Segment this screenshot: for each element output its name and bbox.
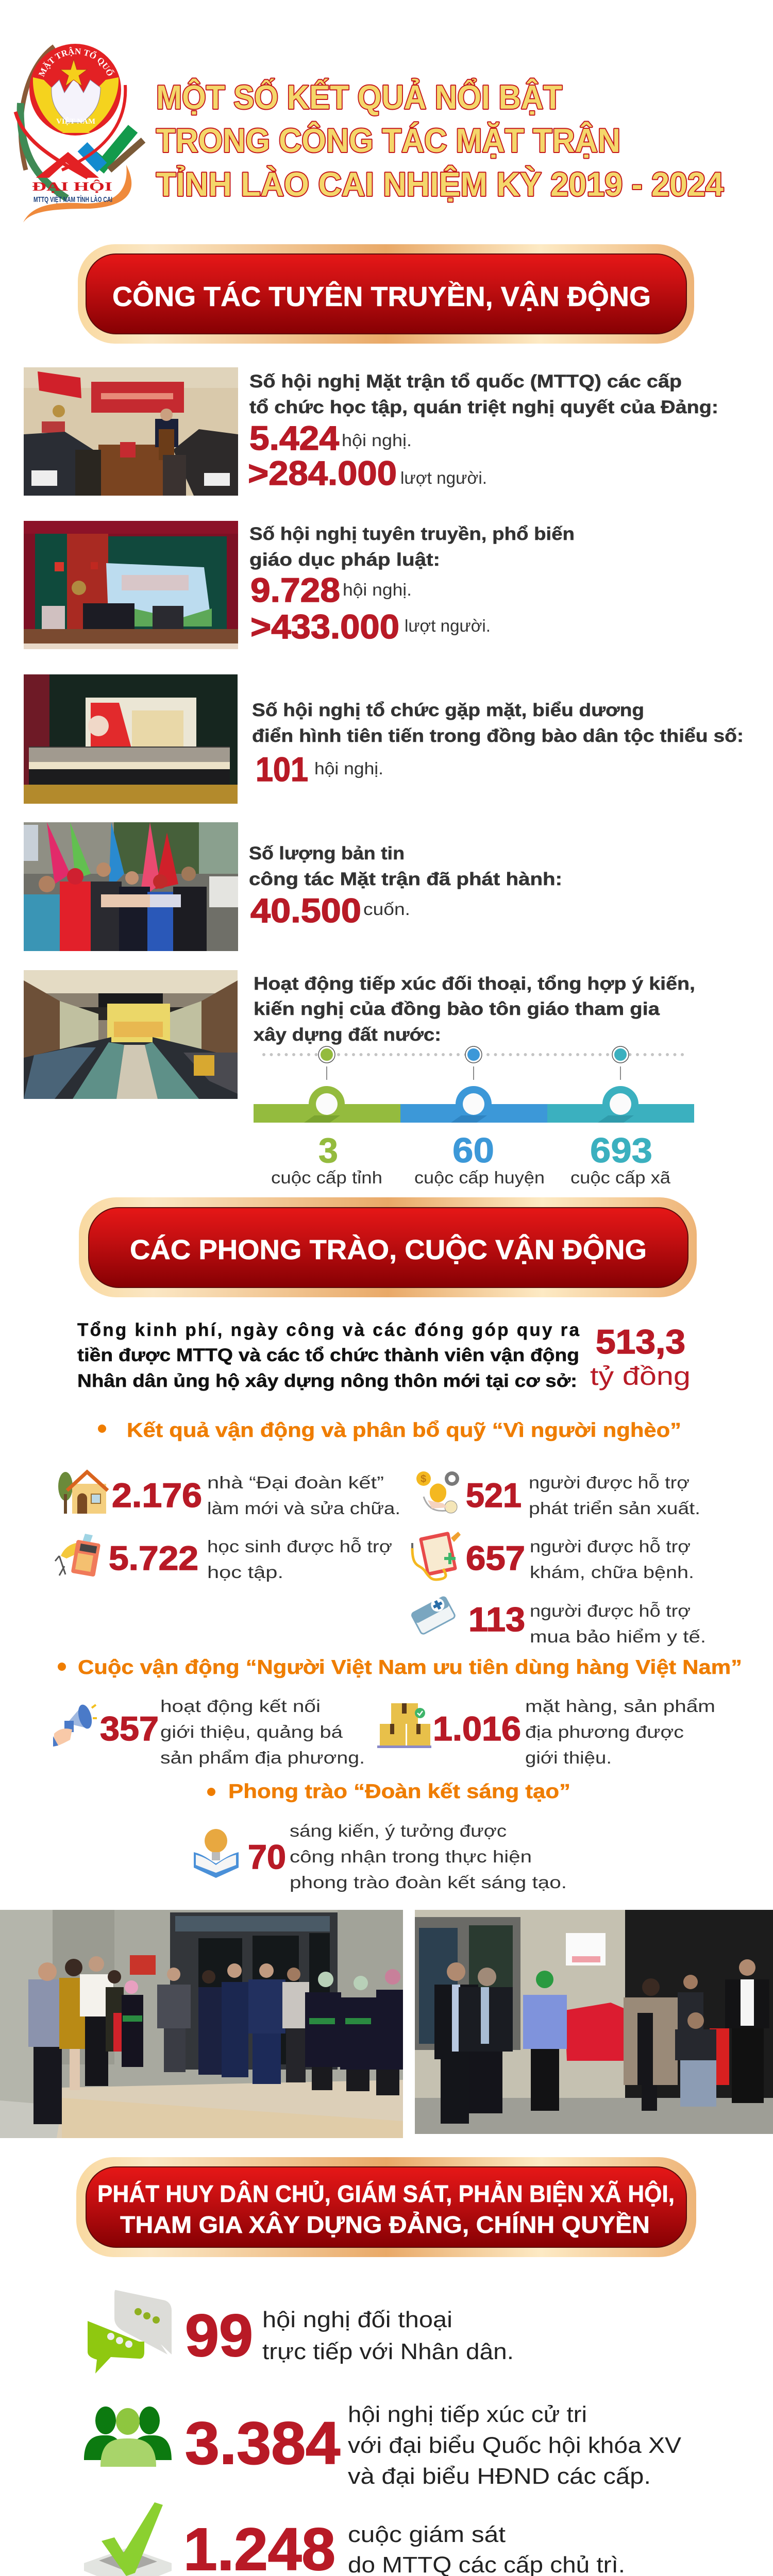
stat: connection activities: 357 <box>100 1709 159 1748</box>
photo: honoring ceremony <box>24 674 238 804</box>
icon: check mark <box>84 2502 172 2576</box>
stat: health care: 657 <box>466 1539 525 1577</box>
text block: total contributions: Nhân dân ủng hộ xây dựng nông thôn mới tại cơ sở: <box>77 1371 577 1391</box>
stat: initiatives <box>248 1821 567 1892</box>
icon: money hand: $ <box>421 1473 426 1485</box>
stat: province: 3 <box>318 1131 338 1170</box>
title: TỈNH LÀO CAI NHIỆM KỲ 2019 - 2024 <box>156 165 724 203</box>
stat: connection activities: sản phẩm địa phương. <box>160 1748 365 1767</box>
stat: production support: 521 <box>466 1476 522 1514</box>
text block: total contributions: Tổng kinh phí, ngày công và các đóng góp quy ra <box>77 1320 580 1340</box>
stat: connection activities: giới thiệu, quảng bá <box>160 1722 343 1741</box>
photo: reading bulletin <box>24 822 238 951</box>
stat: district <box>414 1131 545 1187</box>
icon: house <box>58 1472 108 1514</box>
stat: students: học tập. <box>207 1563 283 1582</box>
heading <box>97 2180 675 2238</box>
stat: province: cuộc cấp tỉnh <box>271 1168 382 1187</box>
text block: Party resolutions <box>248 371 718 492</box>
stat: dialogues <box>185 2302 514 2369</box>
stat: health insurance: 113 <box>468 1600 525 1638</box>
photo: house handover right <box>415 1910 773 2134</box>
text block: Party resolutions: 5.424 <box>249 419 339 457</box>
icon: light bulb on book <box>194 1829 239 1878</box>
stat: students: học sinh được hỗ trợ <box>207 1537 392 1556</box>
stat: students <box>109 1537 392 1582</box>
stat: voter meetings <box>185 2402 682 2489</box>
stat: connection activities: hoạt động kết nối <box>160 1697 321 1716</box>
stat: initiatives: 70 <box>248 1838 286 1876</box>
stat: commune: 693 <box>590 1131 652 1170</box>
panel: section banner 3 <box>76 2157 696 2257</box>
stat: commune <box>570 1131 671 1187</box>
stat: local products: mặt hàng, sản phẩm <box>525 1697 715 1716</box>
text block: legal education: giáo dục pháp luật: <box>249 550 440 570</box>
marker: province <box>318 1046 335 1080</box>
stat: health insurance: người được hỗ trợ <box>530 1601 691 1620</box>
stat: commune: cuộc cấp xã <box>570 1168 671 1187</box>
band: teal segment <box>547 1086 694 1123</box>
stat: houses: nhà “Đại đoàn kết” <box>207 1473 384 1492</box>
stat: connection activities <box>100 1697 365 1767</box>
text block: religious dialogue: kiến nghị của đồng bào tôn giáo tham gia <box>254 999 660 1019</box>
timeline: dialogue levels <box>254 1046 694 1187</box>
stat: local products: giới thiệu. <box>525 1748 612 1767</box>
stat: health care: khám, chữa bệnh. <box>530 1563 694 1582</box>
title <box>156 78 724 203</box>
icon: people <box>84 2406 172 2467</box>
stat: district: cuộc cấp huyện <box>414 1168 545 1187</box>
text block: legal education <box>249 524 575 646</box>
icon: megaphone <box>53 1703 97 1747</box>
heading: PHÁT HUY DÂN CHỦ, GIÁM SÁT, PHẢN BIỆN XÃ HỘI, <box>97 2180 675 2207</box>
icon: calculator <box>55 1534 100 1577</box>
text block: ethnic minority honors: hội nghị. <box>314 759 383 778</box>
icon: boxes <box>377 1703 431 1748</box>
text block: total contributions: tiền được MTTQ và các tổ chức thành viên vận động <box>77 1345 579 1365</box>
text block: bulletins: công tác Mặt trận đã phát hành: <box>249 869 562 889</box>
icon: congress logo <box>13 44 145 223</box>
stat: voter meetings: với đại biểu Quốc hội khóa XV <box>348 2433 682 2458</box>
panel: section banner 1 <box>78 244 694 344</box>
text block: bulletins: Số lượng bản tin <box>249 843 405 863</box>
text block: legal education: lượt người. <box>405 616 491 635</box>
marker: commune <box>612 1046 629 1080</box>
icon: congress logo: MTTQ VIỆT NAM TỈNH LÀO CAI <box>33 195 112 204</box>
text block: total contributions: tỷ đồng <box>590 1362 691 1391</box>
text block: bulletins: cuốn. <box>363 900 410 919</box>
marker: district <box>465 1046 482 1080</box>
text block: legal education: 9.728 <box>250 571 340 609</box>
photo: conference 1 <box>24 367 238 496</box>
stat: initiatives: sáng kiến, ý tưởng được <box>290 1821 507 1840</box>
stat: voter meetings: và đại biểu HĐND các cấp. <box>348 2464 651 2489</box>
text block: Party resolutions: lượt người. <box>400 468 487 487</box>
heading: creative solidarity: Phong trào “Đoàn kết sáng tạo” <box>228 1781 570 1803</box>
icon: congress logo: VIỆT NAM <box>56 117 95 126</box>
heading: THAM GIA XÂY DỰNG ĐẢNG, CHÍNH QUYỀN <box>120 2211 650 2238</box>
stat: initiatives: công nhận trong thực hiện <box>290 1847 532 1866</box>
stat: health care: người được hỗ trợ <box>530 1537 691 1556</box>
text block: religious dialogue <box>254 974 695 1045</box>
title: TRONG CÔNG TÁC MẶT TRẬN <box>156 122 620 159</box>
text block: Party resolutions: Số hội nghị Mặt trận tổ quốc (MTTQ) các cấp <box>249 371 682 392</box>
stat: production support: phát triển sản xuất. <box>529 1499 700 1518</box>
photo: workshop hall <box>24 970 238 1099</box>
stat: health insurance: mua bảo hiểm y tế. <box>530 1627 706 1646</box>
text block: bulletins <box>249 843 562 929</box>
stat: production support: người được hỗ trợ <box>529 1473 690 1492</box>
icon: medical clipboard <box>412 1532 461 1580</box>
text block: total contributions: 513,3 <box>596 1323 685 1361</box>
text block: legal education: hội nghị. <box>343 580 412 599</box>
text block: Party resolutions: hội nghị. <box>342 431 412 450</box>
text block: ethnic minority honors: Số hội nghị tổ chức gặp mặt, biểu dương <box>252 700 644 720</box>
stat: local products <box>433 1697 715 1767</box>
photo: legal conference <box>24 521 238 649</box>
heading: CÁC PHONG TRÀO, CUỘC VẬN ĐỘNG <box>130 1234 647 1265</box>
text block: bulletins: 40.500 <box>250 891 361 929</box>
panel: section banner 2 <box>79 1197 697 1297</box>
stat: dialogues: 99 <box>185 2302 253 2369</box>
stat: province <box>271 1131 382 1187</box>
icon: chat bubbles <box>88 2290 172 2374</box>
heading: CÔNG TÁC TUYÊN TRUYỀN, VẬN ĐỘNG <box>112 281 651 312</box>
stat: dialogues: hội nghị đối thoại <box>262 2307 452 2332</box>
stat: supervisions: cuộc giám sát <box>348 2522 506 2547</box>
stat: students: 5.722 <box>109 1539 198 1577</box>
icon: insurance card <box>410 1594 456 1635</box>
band: blue segment <box>400 1086 547 1123</box>
text block: Party resolutions: >284.000 <box>248 454 397 492</box>
stat: houses <box>112 1473 400 1518</box>
stat: initiatives: phong trào đoàn kết sáng tạo. <box>290 1873 567 1892</box>
stat: houses: 2.176 <box>112 1476 202 1514</box>
title: MỘT SỐ KẾT QUẢ NỔI BẬT <box>156 78 562 116</box>
stat: local products: 1.016 <box>433 1709 521 1748</box>
text block: legal education: >433.000 <box>250 607 399 646</box>
stat: voter meetings: hội nghị tiếp xúc cử tri <box>348 2402 587 2427</box>
text block: ethnic minority honors: điển hình tiên tiến trong đồng bào dân tộc thiểu số: <box>252 726 744 746</box>
text block: religious dialogue: xây dựng đất nước: <box>254 1025 441 1045</box>
stat: supervisions <box>183 2516 625 2576</box>
stat: local products: địa phương được <box>525 1722 684 1741</box>
header <box>13 44 725 223</box>
text block: ethnic minority honors <box>252 700 744 788</box>
stat: production support <box>466 1473 700 1518</box>
stat: health insurance <box>468 1600 706 1646</box>
text block: ethnic minority honors: 101 <box>256 750 308 788</box>
photo: house handover left <box>0 1910 403 2138</box>
band: green segment <box>254 1086 400 1123</box>
heading: poor fund: Kết quả vận động và phân bổ quỹ “Vì người nghèo” <box>127 1419 681 1442</box>
heading: Vietnamese goods: Cuộc vận động “Người Việt Nam ưu tiên dùng hàng Việt Nam” <box>78 1656 742 1679</box>
text block: total contributions <box>77 1320 691 1391</box>
text block: religious dialogue: Hoạt động tiếp xúc đối thoại, tổng hợp ý kiến, <box>254 974 695 994</box>
stat: health care <box>466 1537 694 1582</box>
text block: Party resolutions: tổ chức học tập, quán triệt nghị quyết của Đảng: <box>249 397 718 417</box>
icon: congress logo: ĐẠI HỘI <box>32 180 112 194</box>
stat: voter meetings: 3.384 <box>185 2410 340 2477</box>
icon: money hand <box>416 1471 459 1513</box>
text block: legal education: Số hội nghị tuyên truyền, phổ biến <box>249 524 575 544</box>
stat: district: 60 <box>452 1131 494 1170</box>
stat: houses: làm mới và sửa chữa. <box>207 1499 400 1518</box>
stat: dialogues: trực tiếp với Nhân dân. <box>262 2339 514 2364</box>
